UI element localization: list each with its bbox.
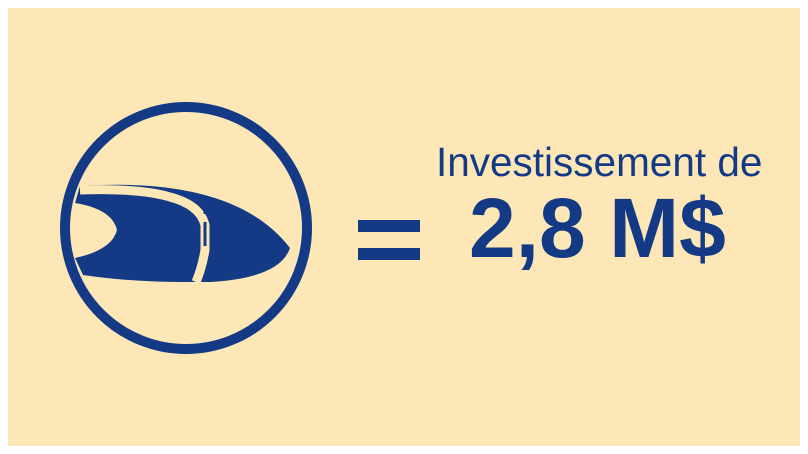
text: amount: 2,8 M$ <box>469 181 726 275</box>
text: Investissement de: Investissement de <box>436 139 762 185</box>
equals sign <box>358 220 420 260</box>
